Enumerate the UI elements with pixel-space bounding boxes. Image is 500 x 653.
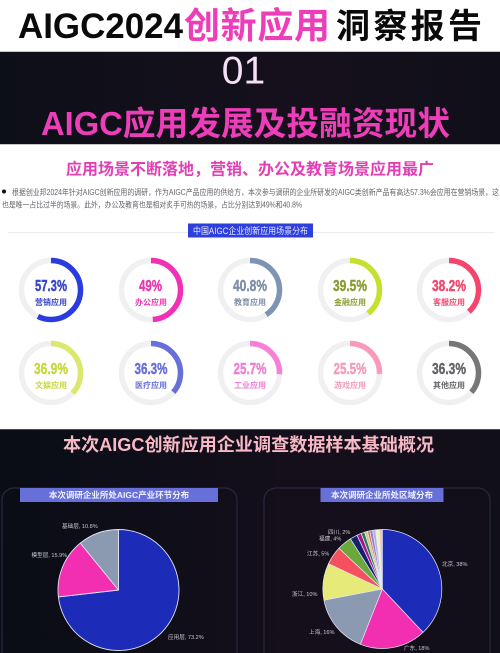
text block: intro paragraph: 也是唯一占比过半的场景。此外，办公及教育也是相对炙手可热的场景，占比分别达到49%和40.8%	[2, 200, 302, 210]
panel: region pie	[264, 488, 490, 653]
donut: 营销应用	[22, 260, 80, 320]
panel: industry chain pie: 本次调研企业所处AIGC产业环节分布	[49, 490, 190, 500]
pie labels: 浙江, 10%	[292, 590, 318, 598]
section number: 01	[222, 50, 265, 92]
title	[18, 5, 482, 46]
pie labels: 江苏, 5%	[307, 550, 329, 558]
pie labels: 模型层, 15.9%	[32, 551, 67, 559]
pie labels: 广东, 18%	[404, 644, 430, 652]
donut: 教育应用: 教育应用	[234, 297, 266, 307]
pie chart	[323, 530, 442, 648]
donut: 营销应用: 57.3%	[35, 278, 67, 295]
donut: 办公应用	[122, 260, 180, 320]
pie labels: 四川, 2%	[328, 529, 350, 536]
pie labels	[292, 529, 468, 652]
donut: 金融应用: 39.5%	[333, 278, 367, 295]
pie chart	[58, 530, 179, 650]
donut: 办公应用: 49%	[139, 278, 162, 295]
donut: 金融应用: 金融应用	[334, 297, 366, 307]
donut: 办公应用: 办公应用	[135, 297, 167, 307]
donut: 工业应用	[220, 344, 280, 402]
pie labels: 福建, 4%	[319, 534, 341, 542]
donut: 文娱应用: 36.9%	[34, 361, 68, 378]
panel: region pie: 本次调研企业所处区域分布	[331, 490, 433, 500]
panel: survey sample overview	[0, 429, 500, 653]
donut: 游戏应用	[320, 344, 380, 402]
donut: 工业应用: 工业应用	[234, 380, 266, 390]
donut: 教育应用: 40.8%	[233, 278, 267, 295]
title: AIGC2024	[18, 7, 184, 46]
donut: 工业应用: 25.7%	[234, 361, 266, 378]
donut: 客服应用: 客服应用	[433, 297, 465, 307]
donut: 文娱应用: 文娱应用	[35, 380, 67, 390]
panel: section banner	[0, 50, 500, 144]
heading: 本次AIGC创新应用企业调查数据样本基础概况	[63, 434, 434, 455]
panel: industry chain pie	[2, 488, 237, 653]
donut: 客服应用	[420, 260, 478, 320]
donut: 其他应用: 36.3%	[432, 361, 466, 378]
donut: 医疗应用: 医疗应用	[135, 380, 167, 390]
chart title: scenario distribution	[188, 224, 313, 238]
chart title: scenario distribution: 中国AIGC企业创新应用场景分布	[193, 225, 308, 236]
title: 创新应用	[184, 5, 330, 46]
donut: 医疗应用: 36.3%	[134, 361, 168, 378]
pie labels: 应用层, 73.2%	[168, 633, 204, 641]
pie labels: 上海, 16%	[309, 628, 335, 636]
donut: 客服应用: 38.2%	[432, 278, 466, 295]
chart title	[320, 488, 444, 502]
donut: 其他应用: 其他应用	[433, 380, 465, 390]
donut: 游戏应用: 游戏应用	[334, 380, 366, 390]
donut: 金融应用	[320, 260, 380, 320]
donut: 教育应用	[220, 260, 280, 320]
donut: 其他应用	[420, 344, 478, 402]
donut: 医疗应用	[122, 344, 180, 402]
subtitle: 应用场景不断落地，营销、办公及教育场景应用最广	[66, 160, 434, 178]
chart title	[20, 488, 218, 502]
donut: 文娱应用	[22, 344, 80, 402]
title: 洞察报告	[336, 8, 482, 46]
pie labels	[32, 522, 204, 641]
donut: 营销应用: 营销应用	[35, 297, 67, 307]
text block: intro paragraph	[2, 187, 499, 210]
section heading: AIGC应用发展及投融资现状	[41, 105, 450, 142]
pie labels: 基础层, 10.8%	[62, 522, 98, 530]
donut: 游戏应用: 25.5%	[334, 361, 366, 378]
pie labels: 北京, 38%	[442, 560, 468, 568]
